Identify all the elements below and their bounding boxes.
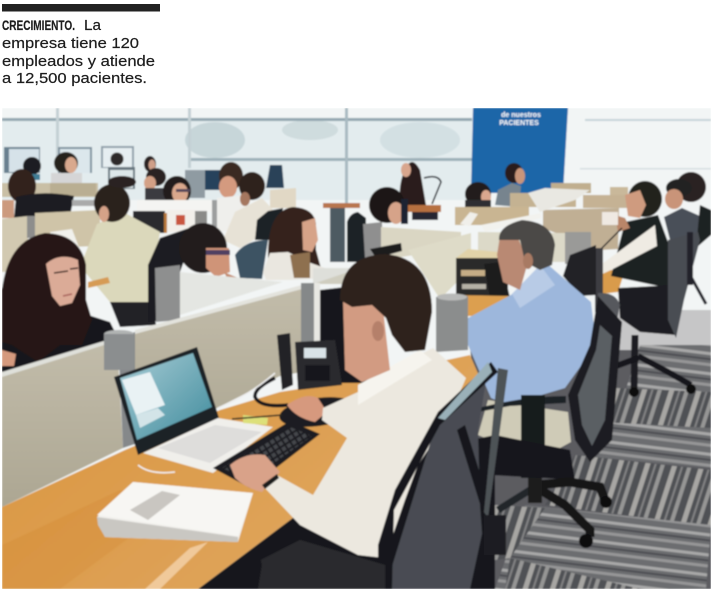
beige-sweater man [82,176,160,327]
mouse hand [287,396,327,422]
desk [2,355,480,589]
dark chair [255,208,283,240]
laptop [114,347,273,473]
silver partition post [436,294,468,352]
desk highlight [145,542,208,589]
centre-back people [400,162,525,220]
man in blue shirt [468,220,596,405]
caption text: empleados y atiende [2,53,155,70]
chair post and phone arm [562,244,621,318]
caption rule [2,4,160,12]
black chair [148,227,192,322]
front chair [205,362,508,589]
laptop cables [138,465,175,473]
blue banner: PACIENTES [499,120,539,127]
front-left woman [2,233,118,372]
carpet floor [470,310,711,589]
right desk post [323,203,366,262]
back-left woman and chair [2,169,102,218]
phone cord [255,378,288,406]
far chair [617,232,708,398]
woman with glasses [179,223,238,280]
under-desk shadow [198,450,496,589]
front partitions [2,283,320,507]
black binder panel [320,287,372,383]
window background [2,108,711,500]
paper tray shelves [456,249,510,298]
caption text: CRECIMIENTO. [2,17,75,33]
tan back cubicles [455,183,628,250]
caption [2,4,160,87]
far-right people [664,172,711,250]
gray divider post [155,265,180,322]
woman with long brown hair [263,207,326,280]
caption text [2,17,155,87]
woman at back desk [162,175,192,201]
woman resting on hand [219,162,243,198]
blue banner [471,108,568,193]
middle partitions [2,188,296,272]
desk phone [277,333,342,390]
keyboard [213,421,320,488]
white cable [218,373,275,408]
mouse pad [277,393,359,431]
caption text: a 12,500 pacientes. [2,70,147,87]
man in vest on phone [600,180,670,288]
blue banner: de nuestros [501,112,541,119]
light partitions [313,227,591,299]
caption text: empresa tiene 120 [2,35,139,52]
back row monitors and people [2,146,284,202]
keyboard hand [230,454,280,492]
document stack [97,482,253,542]
man in white shirt [262,254,466,558]
desk section right [464,294,510,317]
man in patterned shirt [223,172,278,248]
woman in front-left partition area [363,187,408,258]
desk behind sweater man [88,277,110,288]
white partition [180,272,283,315]
sticky note [243,415,268,425]
blue-grey chair [235,240,268,279]
pen [232,415,282,419]
chair of man in blue shirt [471,296,622,548]
caption text: La [84,17,102,34]
